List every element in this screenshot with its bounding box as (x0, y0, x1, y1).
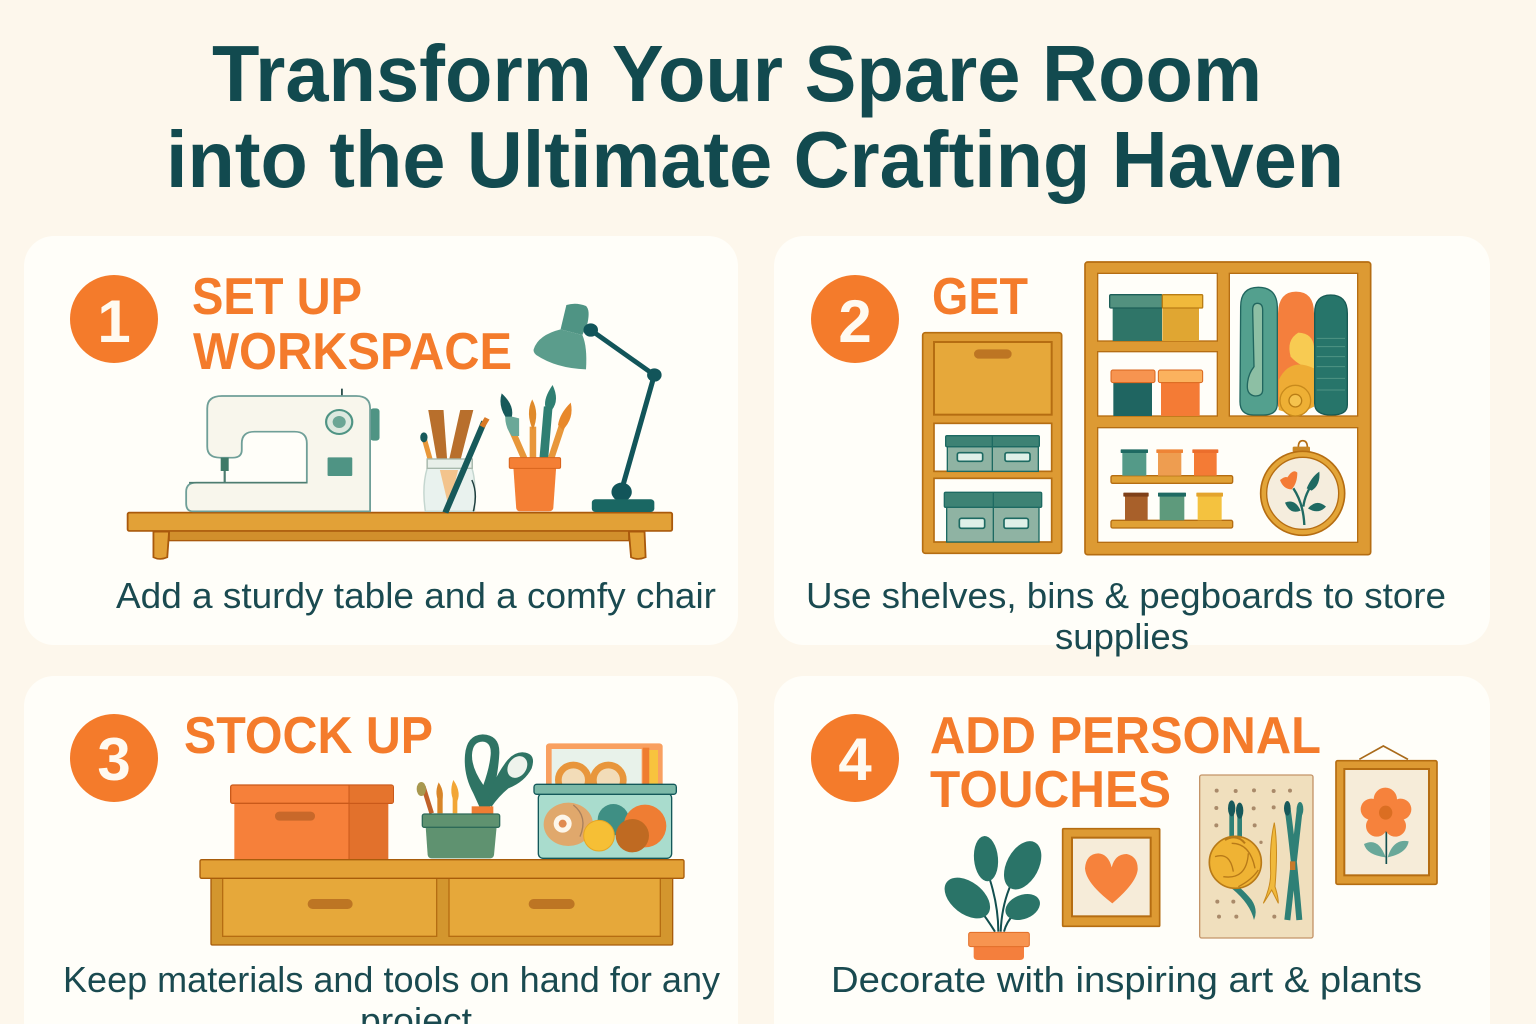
number badge 2 (811, 275, 899, 363)
icon: green pot with tools (417, 734, 533, 858)
illustration: desk with craft tools (128, 304, 672, 559)
number badge 1 (70, 275, 158, 363)
text: workspace description: Add a sturdy table and a comfy chair (116, 575, 716, 616)
icon: small shelves with jars (1111, 449, 1233, 528)
icon: shelf boxes (1110, 295, 1203, 416)
text: storage description (806, 575, 1446, 657)
heading: add personal touches (930, 707, 1321, 819)
number badge 3 (70, 714, 158, 802)
heading: add personal touches: ADD PERSONAL (930, 707, 1321, 765)
icon: right shelving unit (1085, 262, 1371, 555)
heading: set up workspace: WORKSPACE (193, 323, 512, 381)
number badge 4: 4 (838, 726, 872, 793)
panel: get organized (774, 236, 1490, 657)
panel: add personal touches (774, 676, 1490, 1024)
panel: set up workspace (24, 236, 738, 645)
text: decor description: Decorate with inspiring art & plants (831, 959, 1422, 1000)
icon: embroidery hoop (1261, 441, 1345, 535)
title (166, 29, 1344, 204)
icon: desk lamp (534, 304, 662, 512)
text: storage description: supplies (1055, 616, 1189, 657)
icon: orange storage box (231, 785, 393, 859)
heading: set up workspace (192, 268, 512, 381)
icon: dresser (200, 860, 684, 945)
icon: left cabinet (923, 333, 1062, 553)
text: storage description: Use shelves, bins & pegboards to store (806, 575, 1446, 616)
icon: brush pot (500, 385, 572, 511)
illustration: dresser with supplies (200, 734, 684, 945)
number badge 1: 1 (97, 288, 131, 355)
icon: heart frame (1063, 829, 1160, 926)
heading: set up workspace: SET UP (192, 268, 362, 326)
text: materials description: Keep materials and tools on hand for any (63, 959, 720, 1000)
title: into the Ultimate Crafting Haven (166, 115, 1344, 204)
panel: stock up (24, 676, 738, 1024)
number badge 3: 3 (97, 726, 131, 793)
number badge 4 (811, 714, 899, 802)
text: materials description (63, 959, 720, 1024)
heading: add personal touches: TOUCHES (930, 761, 1171, 819)
illustration: storage units (923, 262, 1371, 555)
illustration: wall decor (937, 746, 1437, 960)
icon: pegboard (1200, 775, 1313, 938)
icon: clear bin with yarn (534, 743, 676, 858)
icon: jar of tools (420, 410, 487, 513)
icon: table (128, 513, 672, 559)
title: Transform Your Spare Room (212, 29, 1262, 118)
heading: get: GET (932, 268, 1028, 326)
number badge 2: 2 (838, 288, 872, 355)
icon: fabric rolls (1240, 287, 1347, 416)
icon: sewing machine (186, 389, 380, 511)
icon: flower frame (1336, 746, 1437, 884)
heading: stock up: STOCK UP (184, 707, 433, 765)
icon: potted plant (937, 835, 1049, 960)
